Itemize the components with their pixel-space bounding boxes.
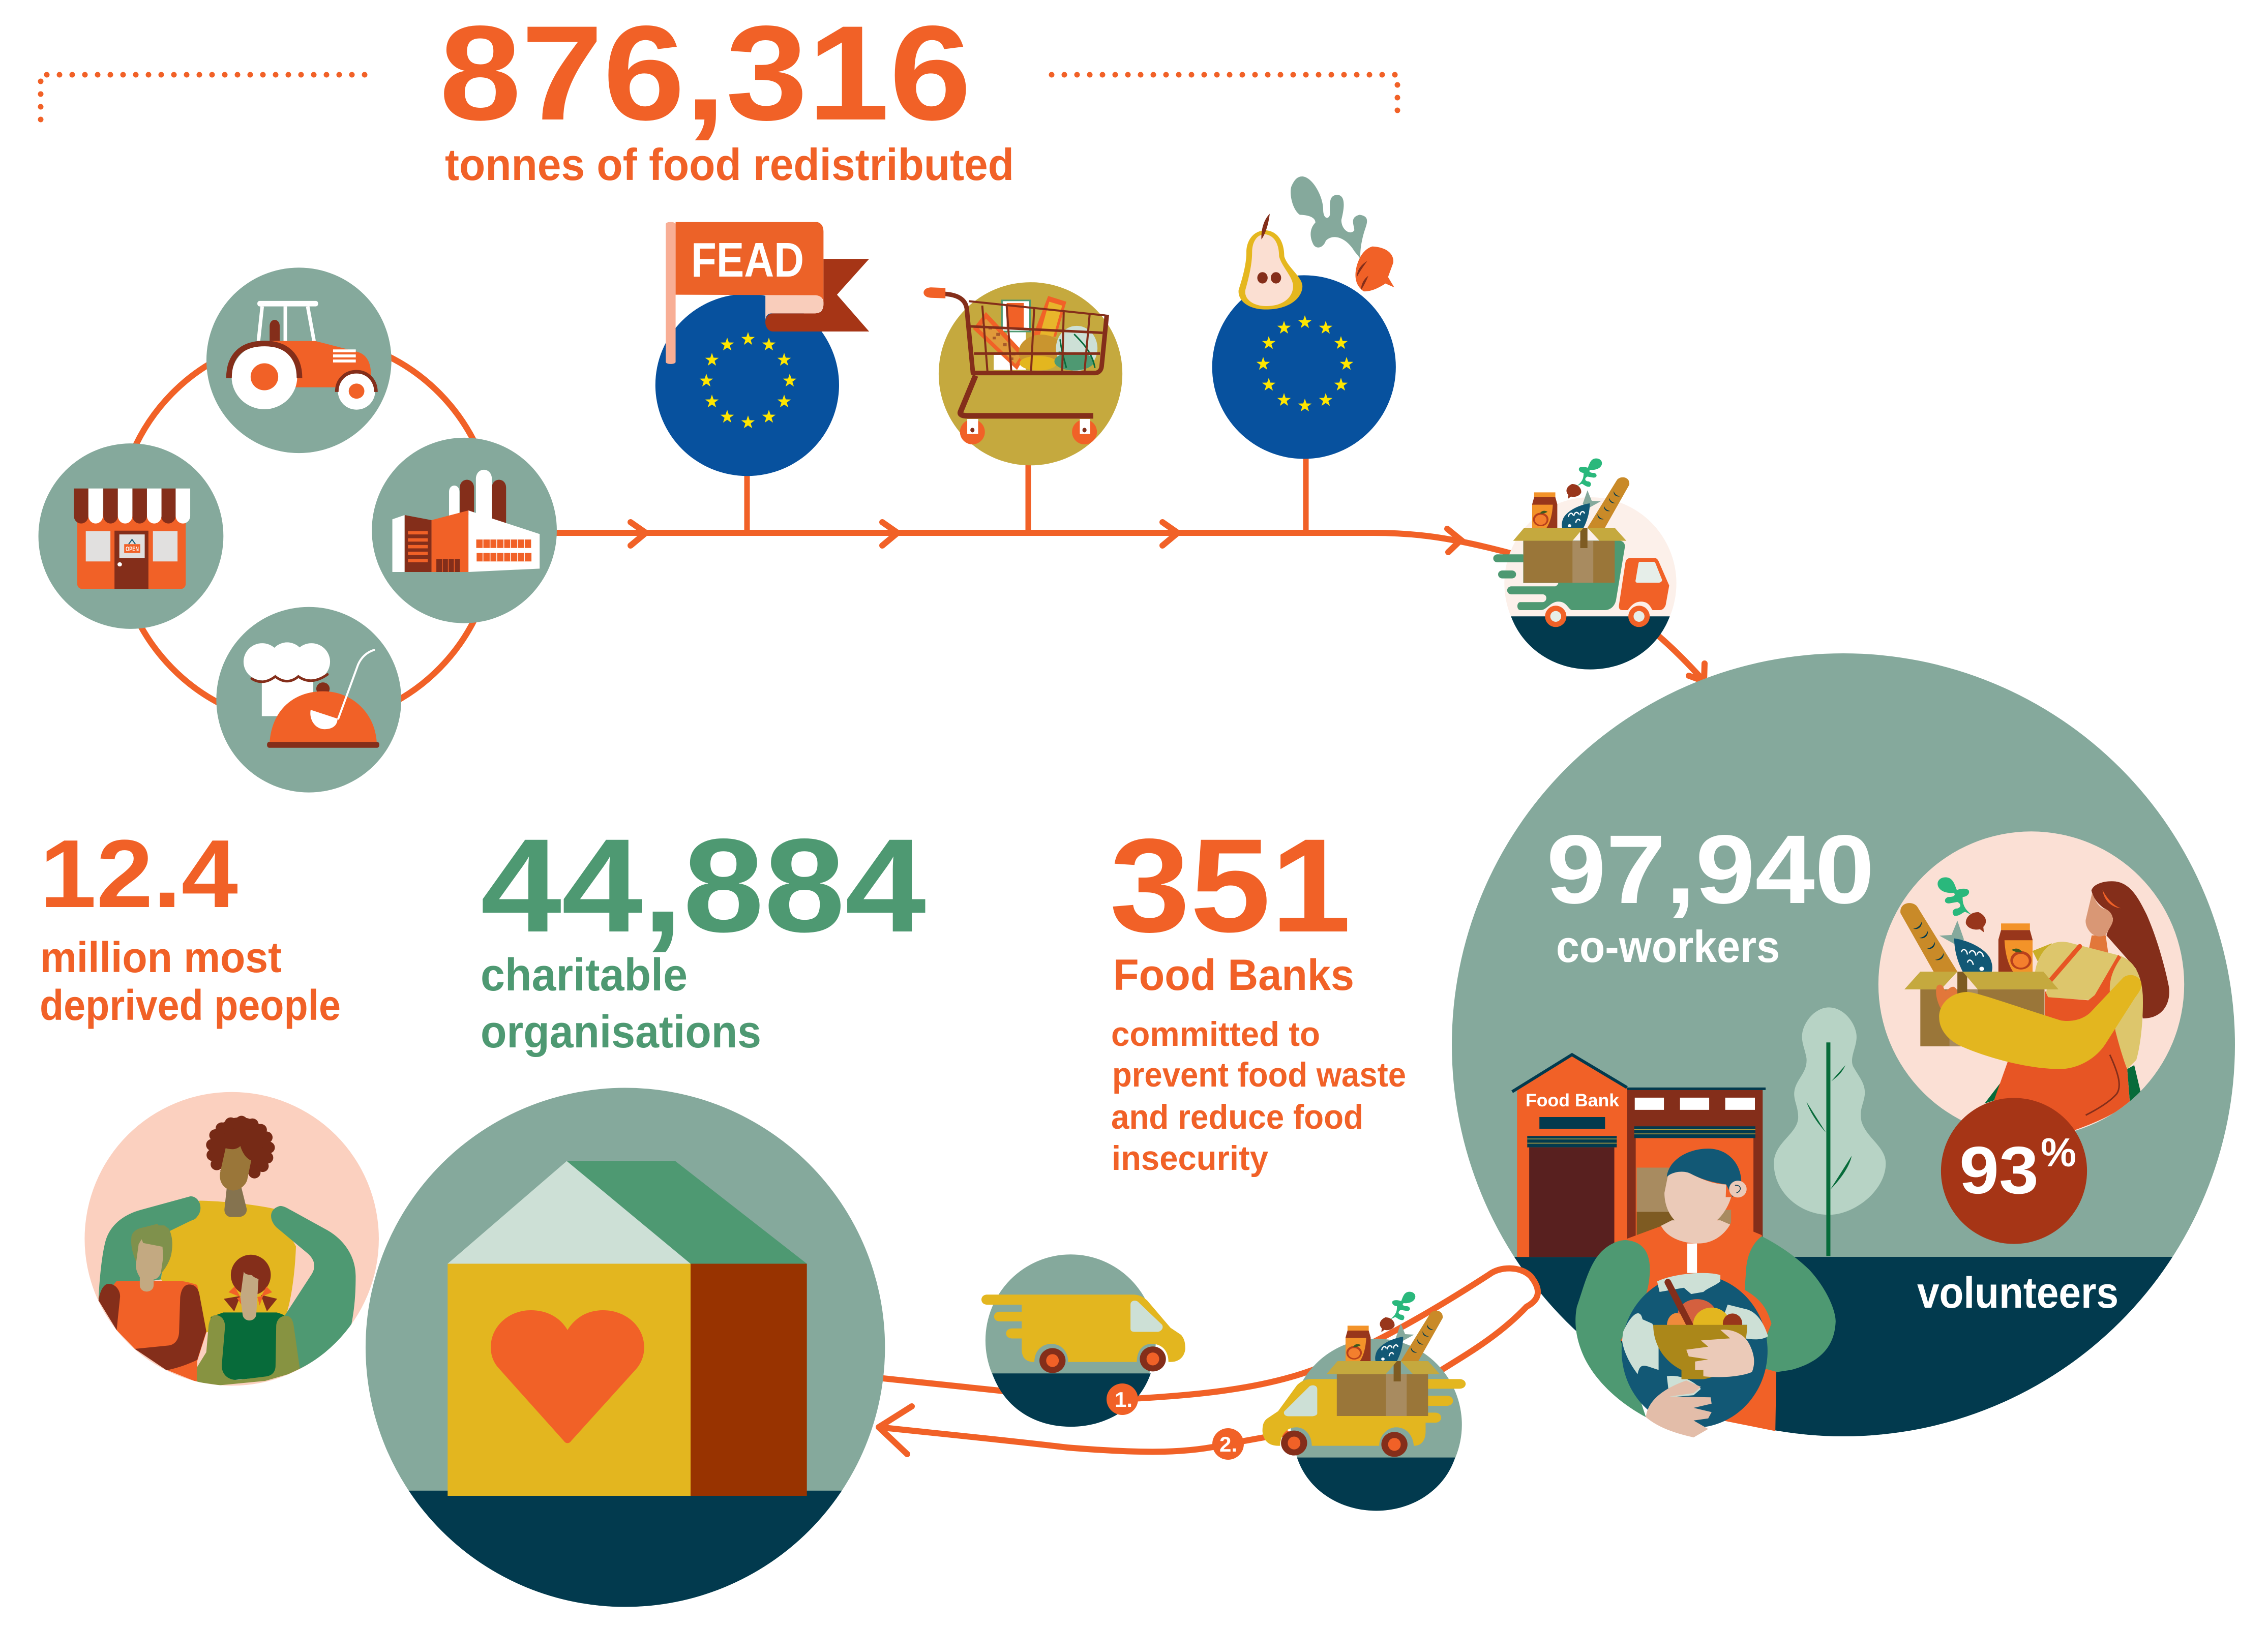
icon: shopping trolley (923, 282, 1122, 465)
illustration: family circle (84, 1092, 379, 1385)
icon: EU stars left (700, 332, 796, 428)
panel: charity house (356, 1088, 915, 1609)
badge: 93% (1941, 1098, 2087, 1244)
stat: 44,884 charitable organisations: charitable (481, 950, 688, 1001)
badge: step 1 (1107, 1383, 1138, 1415)
icon: house with heart (447, 1161, 807, 1496)
badge: 93%: 93 (1959, 1133, 2039, 1208)
stat: 351 Food Banks: and reduce food (1111, 1098, 1363, 1136)
stat: 12.4 million most deprived people: million most (40, 933, 282, 981)
icon: factory (372, 438, 557, 623)
badge: step 2 (1212, 1428, 1244, 1460)
panel: food source icons (39, 267, 557, 793)
panel: food bank circle (1449, 653, 2237, 1440)
icon: delivery truck with groceries (1493, 459, 1677, 670)
text: 97,940 co-workers: 97,940 (1546, 815, 1874, 924)
stat: 12.4 million most deprived people (40, 820, 341, 1029)
heading: tonnes of food redistributed (41, 0, 1397, 190)
badge: step 2: 2. (1219, 1432, 1237, 1456)
text: volunteers: volunteers (1917, 1269, 2118, 1317)
illustration: volunteer with box (1878, 831, 2184, 1137)
icon: chef and cloche (216, 607, 401, 793)
icon: food bank building (1512, 1054, 1766, 1257)
text: Food Bank sign: Food Bank (1526, 1091, 1620, 1110)
text: FEAD: FEAD (691, 233, 804, 287)
icon: shop (39, 443, 223, 629)
stat: 12.4 million most deprived people: deprived people (40, 981, 341, 1029)
stat: 351 Food Banks: prevent food waste (1112, 1056, 1406, 1094)
icon: EU stars right (1257, 315, 1353, 411)
icon: tractor (206, 267, 392, 453)
icon: EU circle with pear and vegetable (1212, 176, 1396, 459)
illustration: food bank building, tree and volunteer (1512, 1007, 1886, 1437)
stat: 44,884 charitable organisations (481, 811, 927, 1058)
badge: 93%: % (2041, 1130, 2076, 1175)
illustration: volunteer hugging globe (1575, 1149, 1836, 1437)
ring of food sources (116, 337, 495, 725)
stat: 351 Food Banks: 351 (1110, 811, 1351, 960)
badge: step 1: 1. (1115, 1388, 1132, 1411)
stat: 351 Food Banks: insecurity (1112, 1139, 1268, 1178)
heading: tonnes of food redistributed: 876,316 (439, 0, 971, 148)
stat: 12.4 million most deprived people: 12.4 (40, 820, 238, 928)
text: 97,940 co-workers: co-workers (1556, 921, 1780, 972)
stat: 44,884 charitable organisations: organisations (481, 1007, 761, 1058)
text: 97,940 co-workers (1546, 815, 1874, 972)
stat: 351 Food Banks: Food Banks (1113, 951, 1354, 1000)
panel: redistribution sources (655, 176, 1396, 476)
arrows: delivery routes (879, 1269, 1538, 1454)
stat: 351 Food Banks: committed to (1111, 1015, 1320, 1053)
label: open sign: OPEN (126, 545, 139, 553)
timeline arrow line (557, 459, 1705, 681)
icon: tree (1774, 1007, 1886, 1256)
stat: 44,884 charitable organisations: 44,884 (481, 811, 927, 960)
icon: EU flag with FEAD banner (655, 222, 869, 476)
stat: 351 Food Banks (1110, 811, 1406, 1178)
icon: loaded van, step 2 (1263, 1292, 1466, 1511)
heading: tonnes of food redistributed: tonnes of food redistributed (445, 139, 1014, 190)
icon: empty van, step 1 (981, 1254, 1185, 1427)
